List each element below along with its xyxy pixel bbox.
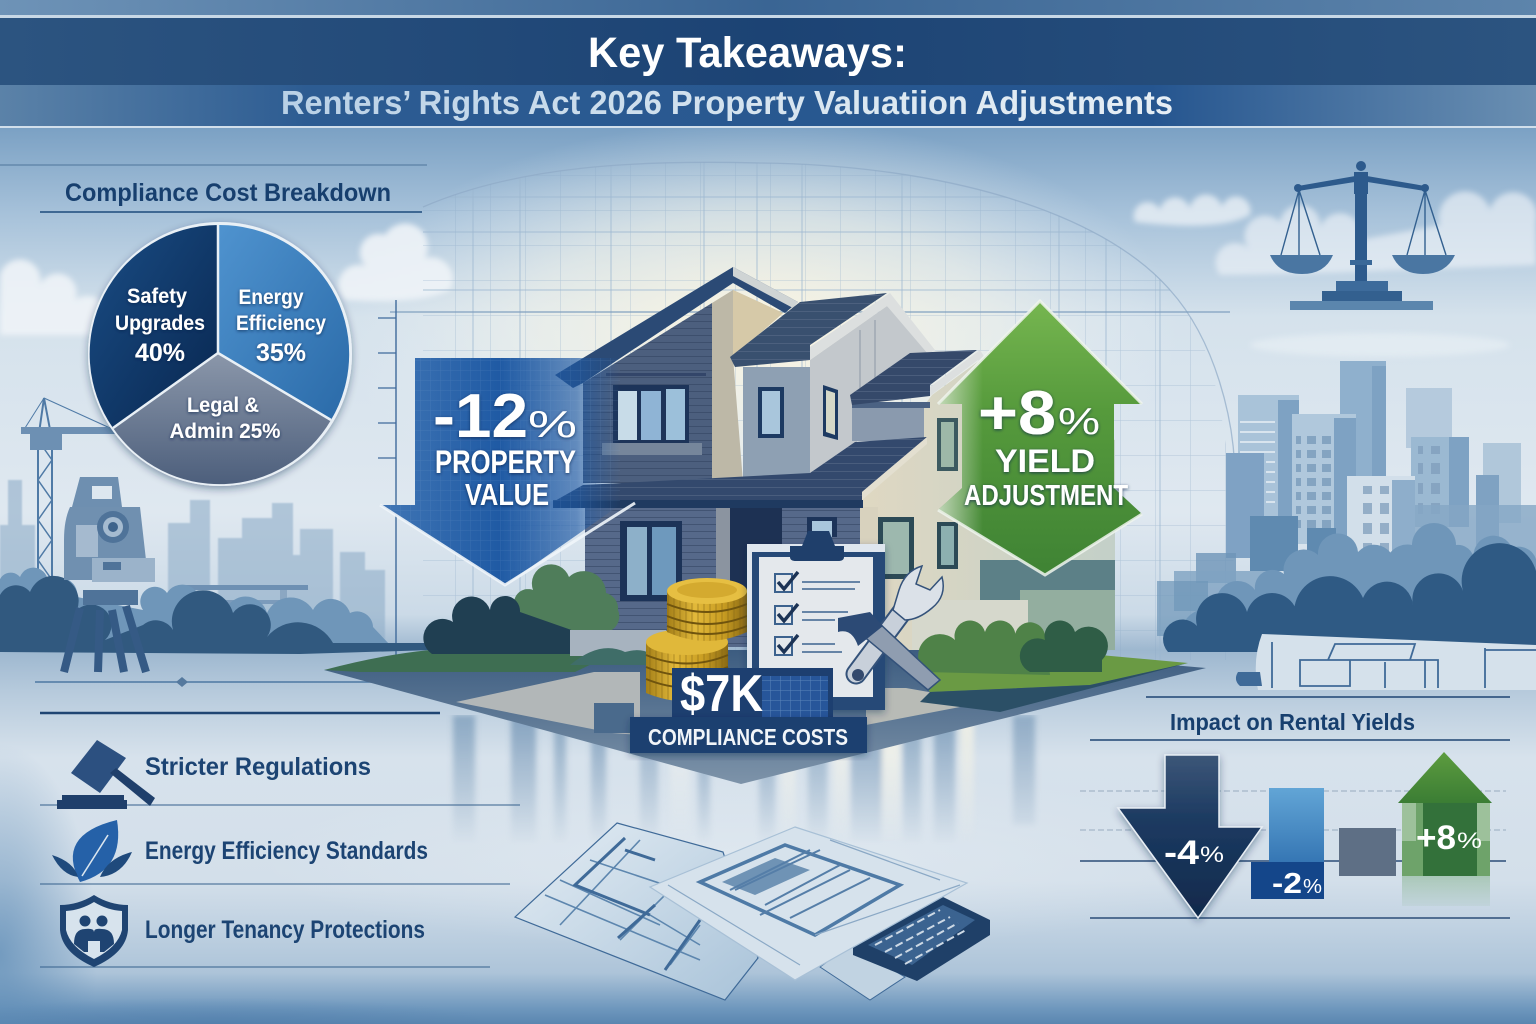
right skyline [1157, 361, 1536, 636]
divider with marker [35, 677, 470, 687]
background valuation grid [378, 160, 1238, 660]
header banner [0, 0, 1536, 128]
subtitle: Renters’ Rights Act 2026 Property Valuatiion Adjustments [281, 84, 1173, 121]
pie chart: 40% [135, 339, 185, 367]
chart: down arrow minus 4 percent: -4 [1164, 834, 1199, 872]
chart: up arrow plus 8 percent [1398, 752, 1492, 906]
yield adjustment figure: +8 [978, 379, 1056, 448]
right shrubs [918, 620, 1108, 675]
chart: bar minus 2 percent: -2 [1272, 868, 1302, 900]
property value figure: PROPERTY [435, 444, 576, 480]
house: roofs [553, 267, 990, 508]
blueprint roll [1236, 634, 1536, 690]
pie chart: 35% [256, 339, 306, 367]
clouds [0, 191, 1536, 357]
down arrow: property value [380, 358, 635, 585]
pie chart: Safety [127, 285, 187, 308]
house: far right wing [855, 360, 1115, 650]
pie chart: Legal & [187, 394, 259, 417]
chart: up arrow plus 8 percent: % [1457, 828, 1482, 853]
heading: impact on rental yields: Impact on Rental Yields [1170, 709, 1415, 735]
icon: coin stacks [646, 578, 747, 702]
blueprint: right sheet [650, 827, 967, 980]
property value figure: % [528, 404, 577, 446]
label: longer tenancy protections: Longer Tenancy Protections [145, 916, 425, 944]
pie chart: Admin 25% [170, 420, 281, 443]
calculator [820, 897, 990, 1000]
chart: down arrow minus 4 percent: % [1200, 842, 1224, 867]
pie chart: Upgrades [115, 312, 205, 335]
pavement and lawn [324, 650, 1206, 784]
badge: compliance costs: $7K [680, 665, 763, 723]
chart: bar minus 2 percent [1251, 788, 1324, 900]
up arrow: yield adjustment [938, 301, 1142, 575]
yield adjustment figure [964, 379, 1128, 512]
chart: neutral bar [1339, 828, 1396, 876]
panel: regulation list [40, 713, 520, 967]
badge: compliance costs: COMPLIANCE COSTS [648, 724, 848, 750]
left shrubs and planter [423, 564, 666, 665]
icon: leaf [52, 820, 132, 882]
icon: clipboard checklist [747, 531, 885, 710]
house: dark left wing [583, 290, 783, 483]
label: stricter regulations: Stricter Regulations [145, 753, 371, 781]
blueprint sheets [515, 823, 990, 1000]
label: energy efficiency standards: Energy Efficiency Standards [145, 837, 428, 865]
title: Key Takeaways: [588, 29, 907, 77]
scales of justice icon [1270, 161, 1455, 310]
property value figure: VALUE [465, 477, 549, 512]
chart: bar minus 2 percent: % [1303, 876, 1322, 898]
icon: shield with family [60, 895, 128, 967]
house [553, 267, 1115, 650]
house: lower storey [585, 507, 878, 647]
surveying instrument [64, 477, 155, 672]
pie chart: Efficiency [236, 312, 326, 335]
yield adjustment figure: ADJUSTMENT [964, 480, 1128, 512]
property value figure: -12 [433, 382, 528, 451]
panel: impact on rental yields [1080, 697, 1510, 918]
right treeline [1163, 523, 1536, 652]
yield adjustment figure: % [1058, 401, 1100, 443]
panel: compliance cost breakdown [0, 165, 427, 486]
yield adjustment figure: YIELD [995, 443, 1095, 479]
house: upper middle gable wall [743, 306, 932, 480]
chart: down arrow minus 4 percent [1118, 755, 1262, 918]
badge: compliance costs [630, 665, 867, 753]
water reflection [453, 715, 1035, 845]
left treeline [0, 568, 433, 654]
chart: up arrow plus 8 percent: +8 [1416, 819, 1456, 857]
left skyline with crane [0, 398, 385, 642]
property value figure [433, 382, 577, 512]
heading: compliance cost breakdown: Compliance Cost Breakdown [65, 179, 391, 207]
pie chart: Energy [238, 286, 304, 309]
blueprint: left sheet [515, 823, 758, 1000]
icon: wrench and hammer [838, 566, 943, 690]
icon: gavel [57, 740, 155, 809]
pie chart [88, 222, 352, 486]
